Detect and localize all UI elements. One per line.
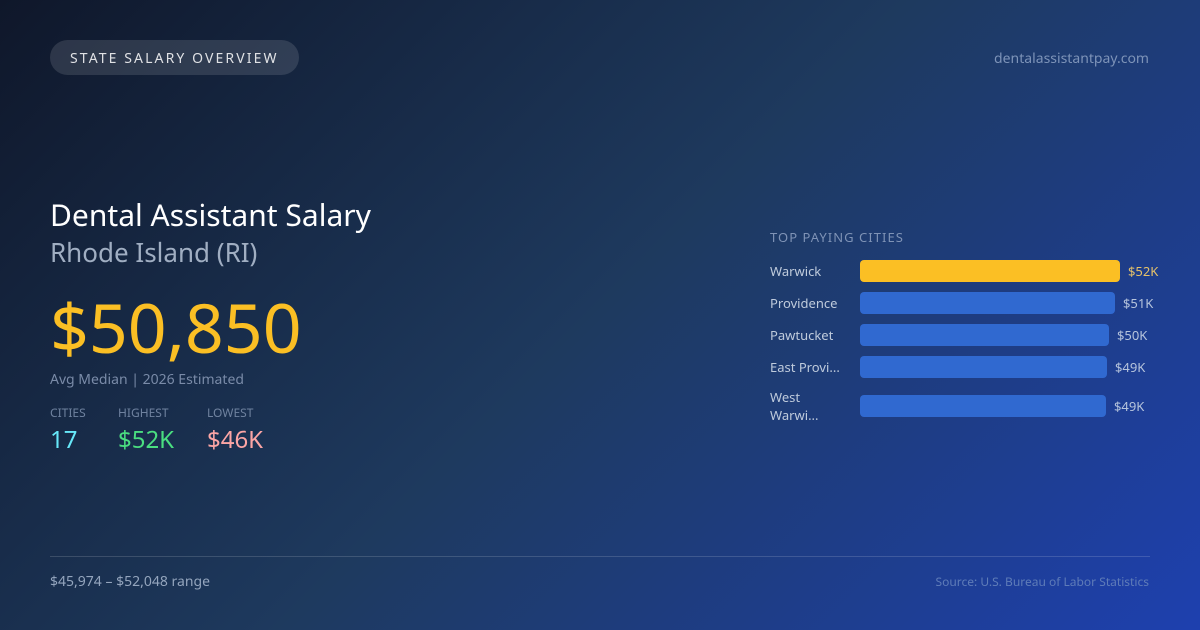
row: East Providence: East Provi...	[770, 358, 840, 376]
chart heading: TOP PAYING CITIES	[770, 228, 904, 246]
stat: lowest: $46K	[207, 423, 263, 456]
row: Providence: Providence	[770, 294, 837, 312]
footer: source: Source: U.S. Bureau of Labor Statistics	[936, 573, 1149, 590]
stat: lowest: LOWEST	[207, 404, 253, 421]
stat: lowest	[207, 404, 263, 456]
footer rule	[50, 556, 1150, 557]
stat: cities: 17	[50, 423, 77, 456]
subtitle: state: Rhode Island (RI)	[50, 234, 257, 270]
headline salary figure: $50,850	[50, 280, 302, 373]
row: West Warwick: Warwi...	[770, 406, 819, 424]
stat: highest	[118, 404, 174, 456]
salary caption: Avg Median | 2026 Estimated	[50, 370, 244, 389]
row: Providence: $51K	[1123, 294, 1153, 312]
bar chart: top paying cities	[770, 260, 1158, 424]
row: Pawtucket: Pawtucket	[770, 326, 833, 344]
badge: state salary overview: STATE SALARY OVERVIEW	[70, 49, 279, 68]
footer: salary range: $45,974 – $52,048 range	[50, 572, 210, 591]
row: Warwick	[770, 260, 1158, 282]
stat: cities	[50, 404, 86, 456]
stat: highest: $52K	[118, 423, 174, 456]
row: Pawtucket	[770, 324, 1148, 346]
title: Dental Assistant Salary	[50, 194, 371, 235]
row: Warwick: Warwick	[770, 262, 821, 280]
stat: highest: HIGHEST	[118, 404, 169, 421]
row: Warwick: $52K	[1128, 262, 1158, 280]
badge: state salary overview	[50, 40, 299, 75]
row: East Providence: $49K	[1115, 358, 1145, 376]
row: Pawtucket: $50K	[1117, 326, 1147, 344]
row: West Warwick	[770, 388, 1144, 424]
stat: cities: CITIES	[50, 404, 86, 421]
row: Providence	[770, 292, 1154, 314]
row: East Providence	[770, 356, 1146, 378]
stats row	[50, 404, 263, 456]
row: West Warwick: West	[770, 388, 800, 406]
site domain: dentalassistantpay.com	[994, 49, 1149, 68]
row: West Warwick: $49K	[1114, 397, 1144, 415]
